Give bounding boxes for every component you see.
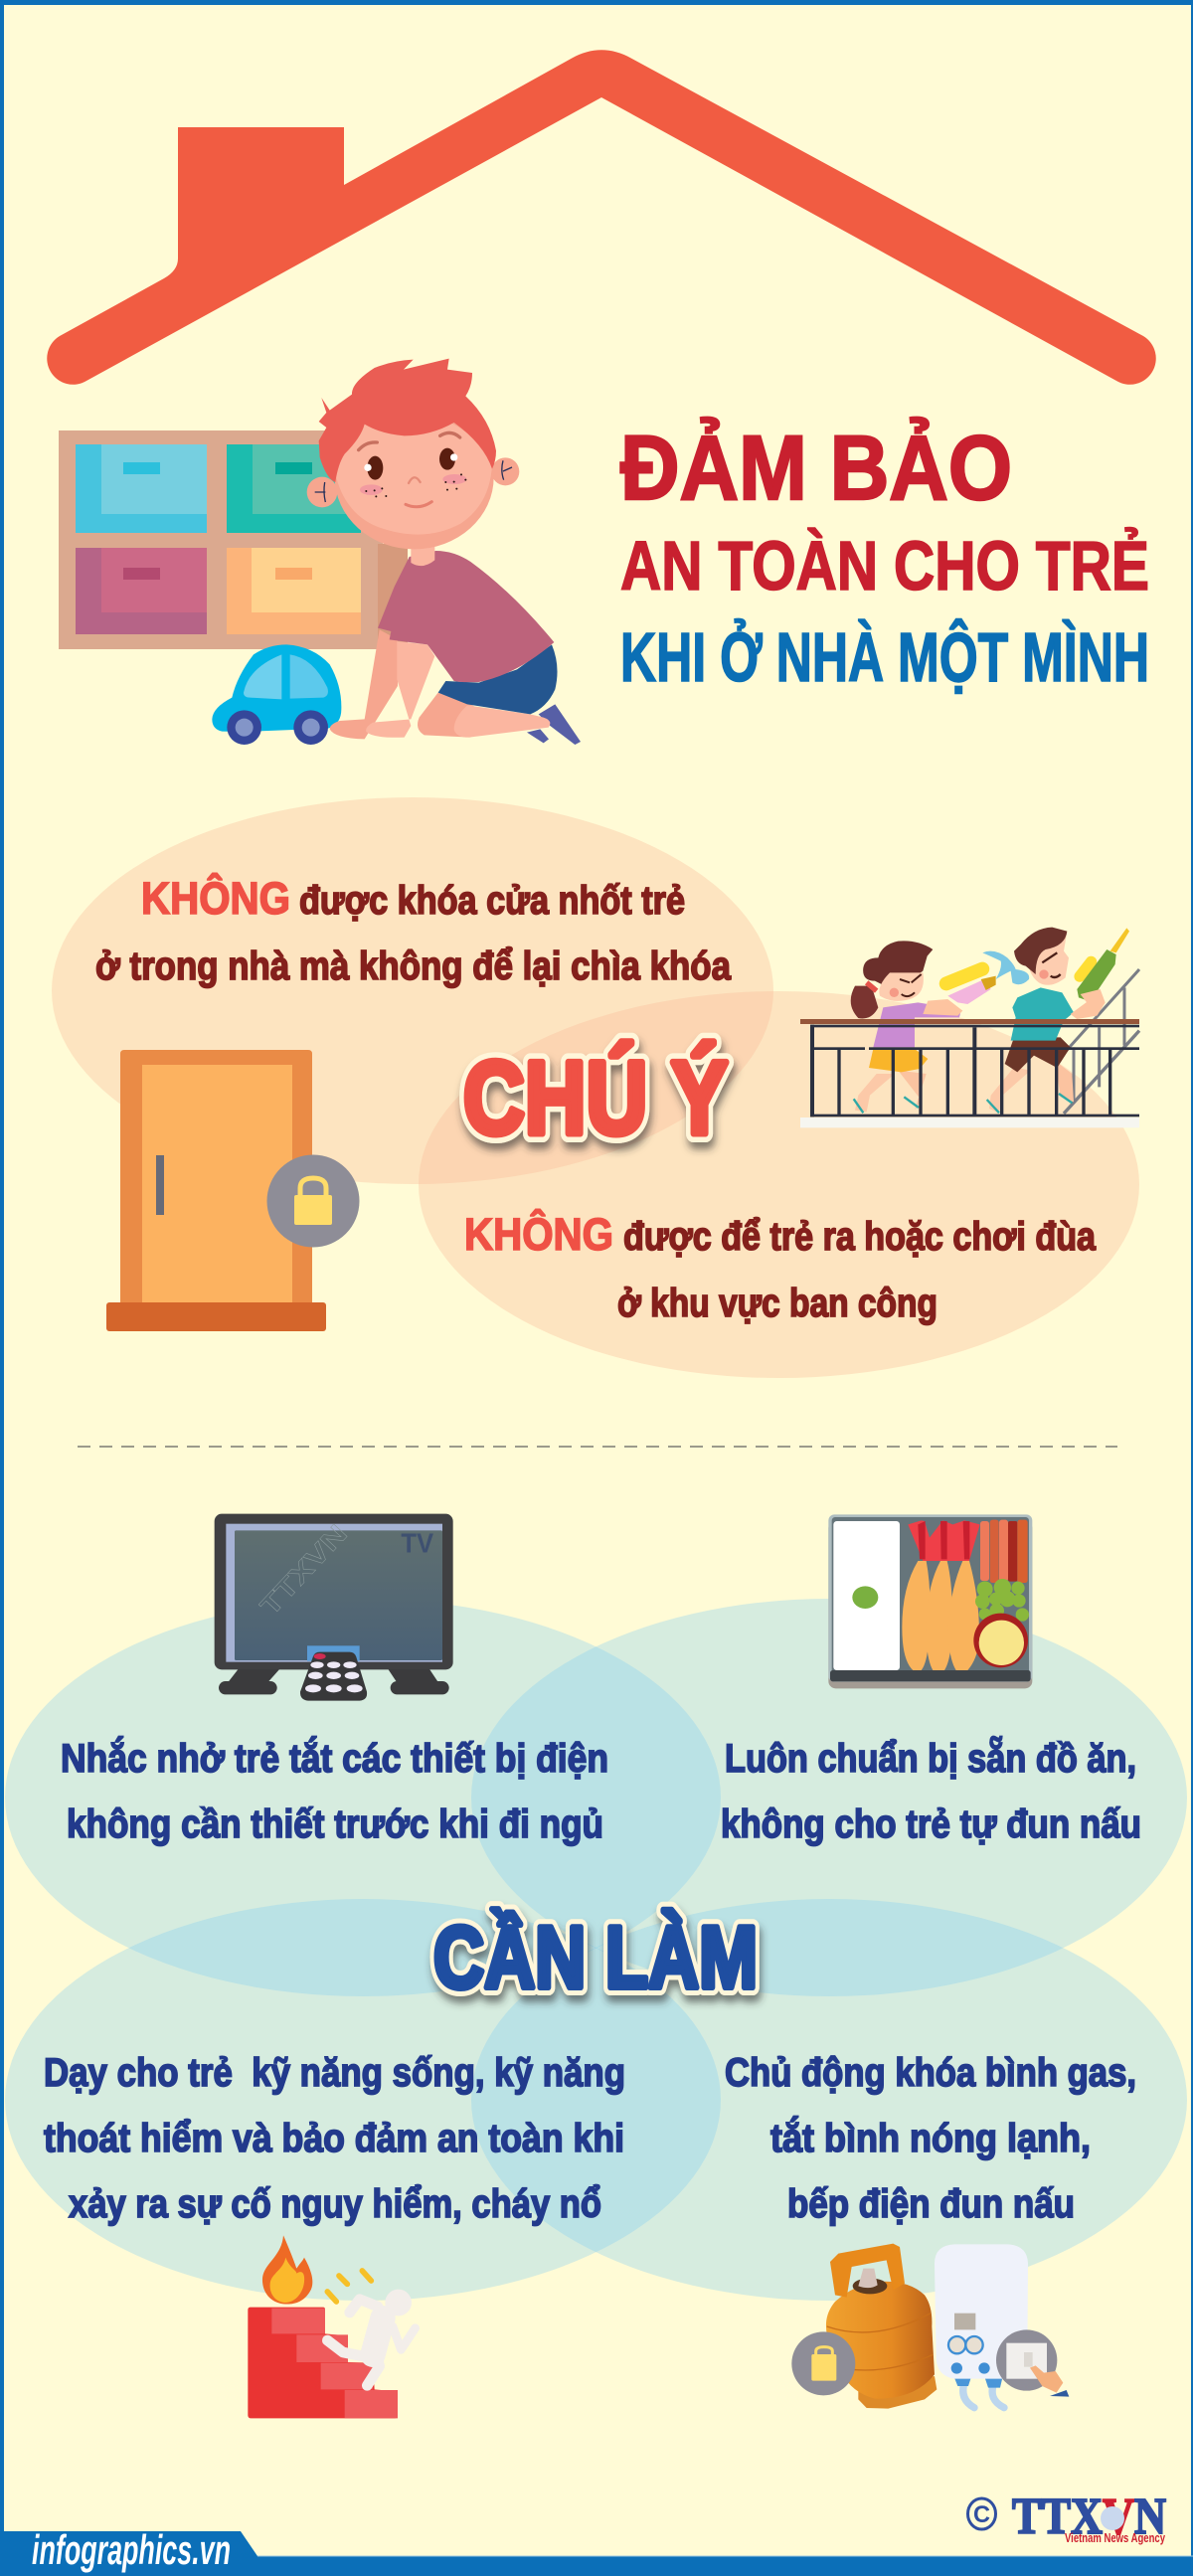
boy — [987, 928, 1106, 1113]
heading: CẦN LÀM: CẦN LÀM — [433, 1908, 758, 2006]
illustration: toy car — [212, 644, 341, 745]
boy: shoes — [527, 704, 581, 745]
boy: eyes and features — [359, 432, 466, 507]
running figure — [327, 2290, 416, 2385]
footer band — [0, 2526, 1193, 2576]
copyright mark — [968, 2498, 996, 2529]
tv screen — [226, 1518, 442, 1662]
heading: CẦN LÀM: CẦN LÀM — [433, 1908, 758, 2006]
text: bottom left action: Dạy cho trẻ kỹ năng sống, kỹ năng — [44, 2051, 625, 2095]
boy: neck — [411, 544, 434, 566]
girl — [851, 941, 962, 1113]
icon: television with remote — [215, 1514, 453, 1701]
footer site name: infographics.vn — [32, 2526, 231, 2573]
wasabi — [852, 1586, 878, 1609]
text: bottom left action — [44, 2051, 625, 2226]
icon: fire escape stairs — [248, 2235, 416, 2418]
tv body — [215, 1514, 453, 1669]
stairs — [248, 2308, 398, 2418]
text: top left action — [61, 1735, 608, 1846]
warning 2 text: ở khu vực ban công — [617, 1282, 937, 1325]
blue bubble: bottom right — [471, 1899, 1187, 2301]
text: bottom right action — [725, 2051, 1136, 2226]
heading: CHÚ Ý: CHÚ Ý — [463, 1041, 728, 1156]
globe — [1101, 2506, 1124, 2530]
remote control — [300, 1652, 367, 1701]
blue bubble: top left — [5, 1599, 721, 1996]
warning 2 text — [464, 1209, 1097, 1325]
text: bottom right action: bếp điện đun nấu — [787, 2182, 1075, 2226]
heading: CHÚ Ý: CHÚ Ý — [463, 1041, 728, 1156]
gas cylinder — [826, 2244, 937, 2409]
boy: arms and legs — [330, 629, 550, 739]
title — [620, 417, 1149, 696]
illustration: children playing on balcony — [800, 928, 1139, 1127]
tv screen: TV — [401, 1528, 433, 1559]
copyright and TTXVN logo — [968, 2489, 1166, 2545]
tv stand — [219, 1668, 449, 1694]
text: top left action: Nhắc nhở trẻ tắt các thiết bị điện — [61, 1735, 608, 1781]
padlock badge — [791, 2331, 855, 2395]
text: top right action: không cho trẻ tự đun nấu — [721, 1803, 1141, 1846]
text: top left action: không cần thiết trước khi đi ngủ — [67, 1803, 603, 1846]
text: bottom right action: tắt bình nóng lạnh, — [770, 2115, 1091, 2160]
warning 1 text — [95, 873, 732, 988]
text: bottom left action: thoát hiểm và bảo đảm an toàn khi — [44, 2117, 624, 2160]
boy: face — [335, 423, 492, 535]
boy: shorts — [438, 644, 558, 714]
copyright mark: C — [973, 2501, 990, 2528]
boy: hair — [319, 359, 496, 482]
text: top right action — [721, 1735, 1141, 1846]
tv screen: TTXVN — [255, 1518, 353, 1622]
boy water gun — [1072, 928, 1129, 1016]
sparks — [327, 2271, 371, 2302]
illustration: drawer cabinet — [59, 430, 408, 649]
girl water gun — [937, 960, 996, 1004]
title line 1: ĐẢM BẢO — [620, 417, 1012, 519]
boy: ears — [307, 457, 519, 507]
icon: gas cylinder, water heater and switch — [791, 2244, 1069, 2409]
water heater — [935, 2244, 1028, 2408]
orange bubble: left — [52, 797, 773, 1184]
flame — [262, 2235, 312, 2305]
orange bubble: right — [419, 991, 1139, 1378]
blue bubble: top right — [471, 1599, 1187, 1996]
blue bubble: bottom left — [5, 1899, 721, 2301]
water splash — [982, 951, 1029, 984]
warning 2 text: KHÔNG — [464, 1209, 613, 1260]
warning 2 text: được để trẻ ra hoặc chơi đùa — [623, 1215, 1097, 1259]
dashed divider — [78, 1446, 1117, 1448]
tray — [828, 1514, 1032, 1688]
text: bottom left action: xảy ra sự cố nguy hiểm, cháy nổ — [69, 2182, 601, 2226]
dipping sauce — [973, 1614, 1028, 1667]
boy: head — [335, 406, 494, 549]
balcony railing — [800, 1019, 1139, 1127]
warning 1 text: KHÔNG — [141, 873, 290, 924]
greens — [975, 1579, 1029, 1622]
shrimp — [902, 1520, 980, 1670]
warning 1 text: ở trong nhà mà không để lại chìa khóa — [95, 945, 732, 988]
TTXVN wordmark: TTXVN — [1012, 2489, 1166, 2545]
stair railing — [1061, 969, 1139, 1114]
roof with chimney — [47, 50, 1156, 385]
illustration: boy kneeling — [307, 359, 581, 745]
rice — [833, 1521, 900, 1670]
icon: padlock badge — [266, 1155, 360, 1247]
text: bottom right action: Chủ động khóa bình gas, — [725, 2051, 1136, 2095]
sausages — [980, 1520, 1028, 1583]
icon: bento box — [828, 1514, 1032, 1688]
boy: shirt — [378, 551, 554, 682]
warning 1 text: được khóa cửa nhốt trẻ — [299, 879, 685, 923]
icon: locked door — [106, 1050, 360, 1331]
text: top right action: Luôn chuẩn bị sẵn đồ ăn, — [725, 1735, 1136, 1781]
switch badge — [996, 2329, 1069, 2397]
